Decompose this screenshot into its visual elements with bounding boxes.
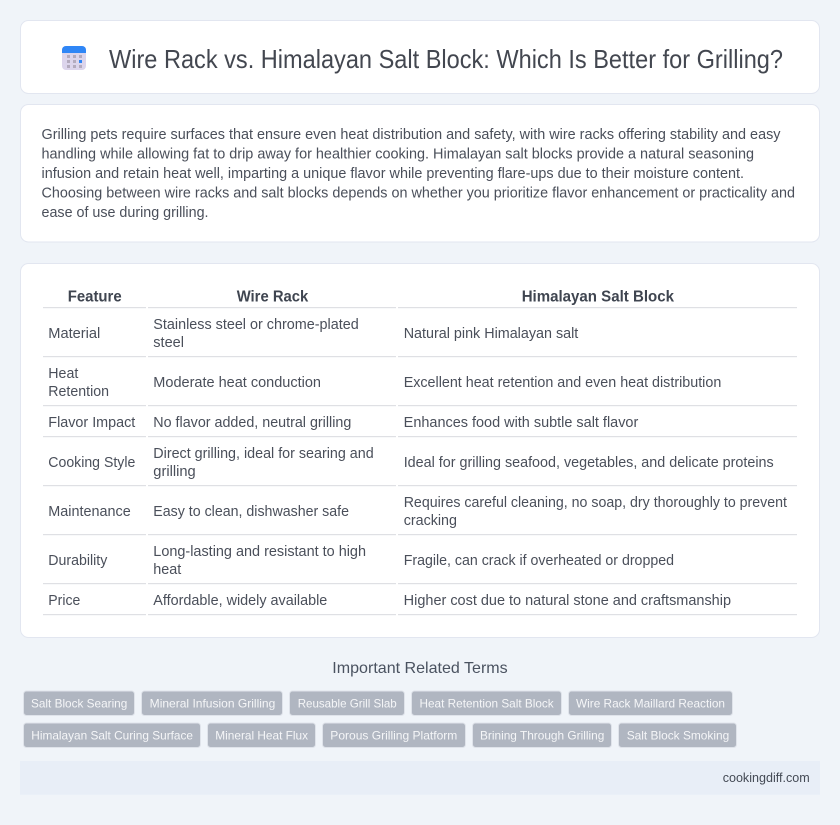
tag: Mineral Infusion Grilling — [150, 696, 275, 710]
row: material: steel — [153, 335, 184, 351]
row: cooking style: Direct grilling, ideal for searing and — [153, 446, 374, 462]
tag — [24, 723, 200, 748]
row: material: Natural pink Himalayan salt — [404, 326, 578, 342]
row: heat retention — [48, 366, 721, 400]
row: durability: Durability — [48, 553, 108, 569]
tag — [568, 691, 732, 716]
row: price: Higher cost due to natural stone and craftsmanship — [404, 593, 731, 609]
icon: calendar — [62, 46, 86, 70]
intro text: handling while allowing fat to drip away for healthier cooking. Himalayan salt blocks provide a natural seasoning — [42, 146, 754, 162]
row: maintenance: Easy to clean, dishwasher safe — [153, 504, 349, 520]
row: material — [48, 317, 578, 351]
tag: Brining Through Grilling — [480, 728, 604, 742]
intro text: Choosing between wire racks and salt blocks depends on whether you prioritize flavor enhancement or practicality and — [42, 186, 795, 202]
tag — [618, 723, 736, 748]
row: durability: heat — [153, 562, 181, 578]
row: heat retention: Moderate heat conduction — [153, 375, 321, 391]
row: cooking style: Ideal for grilling seafood, vegetables, and delicate proteins — [404, 455, 774, 471]
intro text: Grilling pets require surfaces that ensure even heat distribution and safety, with wire racks offering stability and easy — [42, 127, 781, 143]
row: flavor impact — [48, 415, 638, 431]
row: material: Material — [48, 326, 100, 342]
tag: Heat Retention Salt Block — [420, 696, 555, 710]
row: material: Stainless steel or chrome-plated — [153, 317, 359, 333]
tag: Salt Block Smoking — [627, 728, 729, 742]
tag: Himalayan Salt Curing Surface — [31, 728, 193, 742]
row: durability — [48, 544, 674, 578]
source credit: cookingdiff.com — [723, 770, 810, 785]
row: maintenance: cracking — [404, 513, 457, 529]
tag — [24, 691, 134, 716]
title: Wire Rack vs. Himalayan Salt Block: Which Is Better for Grilling? — [109, 46, 783, 74]
tag — [472, 723, 612, 748]
tag — [322, 723, 466, 748]
row: heat retention: Retention — [48, 384, 109, 400]
related term tags — [24, 691, 736, 748]
row: maintenance: Maintenance — [48, 504, 131, 520]
row: flavor impact: Enhances food with subtle salt flavor — [404, 415, 638, 431]
footer bar — [20, 761, 820, 795]
row: cooking style: Cooking Style — [48, 455, 135, 471]
table header: Feature — [68, 288, 122, 306]
row: maintenance: Requires careful cleaning, no soap, dry thoroughly to prevent — [404, 495, 787, 511]
row: flavor impact: Flavor Impact — [48, 415, 135, 431]
row: durability: Fragile, can crack if overheated or dropped — [404, 553, 674, 569]
row: heat retention: Excellent heat retention and even heat distribution — [404, 375, 721, 391]
row: cooking style: grilling — [153, 464, 196, 480]
tag — [142, 691, 282, 716]
intro text — [42, 127, 795, 221]
tag: Reusable Grill Slab — [298, 696, 397, 710]
row: durability: Long-lasting and resistant to high — [153, 544, 366, 560]
tag: Porous Grilling Platform — [330, 728, 457, 742]
row: price — [48, 593, 731, 609]
tag: Salt Block Searing — [31, 696, 127, 710]
table header: Wire Rack — [237, 288, 309, 306]
intro text: infusion and retain heat well, imparting a unique flavor while preventing flare-ups due to their moisture content. — [42, 166, 744, 182]
panel: comparison table — [20, 264, 820, 638]
panel: title card — [20, 20, 820, 94]
intro text: ease of use during grilling. — [42, 205, 208, 221]
heading: important related terms: Important Related Terms — [332, 660, 508, 677]
table header — [68, 288, 674, 306]
tag: Mineral Heat Flux — [215, 728, 308, 742]
row: maintenance — [48, 495, 787, 529]
row: price: Affordable, widely available — [153, 593, 327, 609]
row: cooking style — [48, 446, 774, 480]
table header: Himalayan Salt Block — [522, 288, 674, 306]
row: price: Price — [48, 593, 80, 609]
row: flavor impact: No flavor added, neutral grilling — [153, 415, 351, 431]
tag: Wire Rack Maillard Reaction — [576, 696, 725, 710]
tag — [208, 723, 316, 748]
panel: introduction — [20, 104, 820, 242]
tag — [412, 691, 562, 716]
row: heat retention: Heat — [48, 366, 78, 382]
tag — [290, 691, 404, 716]
